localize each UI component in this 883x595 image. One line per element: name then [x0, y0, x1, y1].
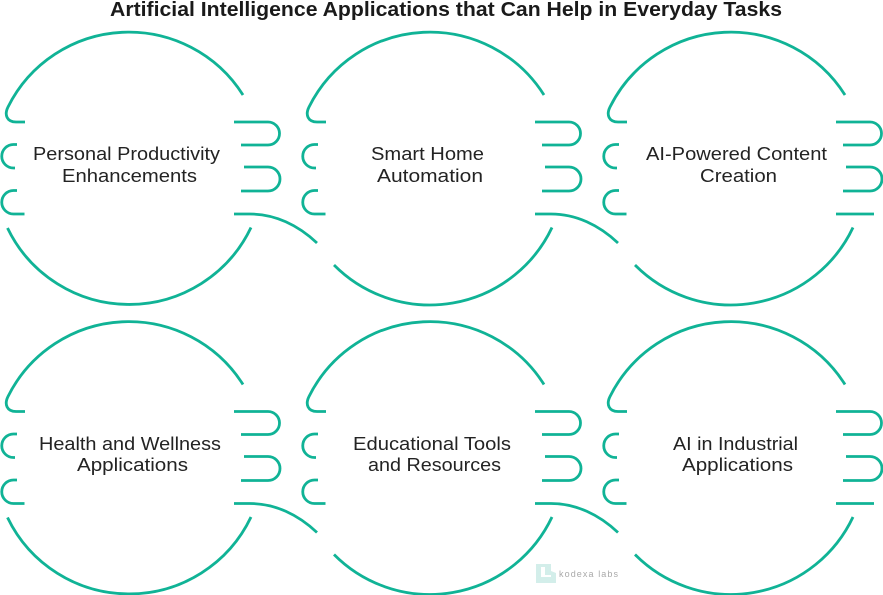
- label: Educational Tools: [353, 434, 511, 454]
- label: Creation: [700, 166, 777, 186]
- icon: logo mark: [536, 564, 556, 583]
- panel: Educational Tools and Resources: [303, 322, 618, 594]
- label: and Resources: [368, 455, 501, 475]
- label: Personal Productivity: [33, 144, 220, 164]
- label: AI in Industrial: [673, 434, 798, 454]
- label: Applications: [682, 455, 793, 475]
- label: Applications: [77, 455, 188, 475]
- panel: Smart Home Automation: [303, 32, 618, 305]
- panel: Personal Productivity Enhancements: [2, 32, 317, 304]
- panel: AI in Industrial Applications: [604, 322, 882, 594]
- label: Health and Wellness: [39, 434, 221, 454]
- ring outline: [604, 32, 882, 305]
- panel: AI-Powered Content Creation: [604, 32, 882, 305]
- ring outline: [303, 322, 618, 594]
- label: AI-Powered Content: [646, 144, 827, 164]
- panel: Health and Wellness Applications: [2, 322, 317, 594]
- label: Smart Home: [371, 144, 484, 164]
- logo: kodexa labs watermark: [536, 564, 618, 583]
- label: Enhancements: [62, 166, 197, 186]
- ring outline: [2, 322, 317, 594]
- label: Automation: [377, 166, 483, 186]
- ring outline: [303, 32, 618, 305]
- logo wordmark: kodexa labs: [559, 569, 618, 579]
- ring outline: [2, 32, 317, 304]
- ring outline: [604, 322, 882, 594]
